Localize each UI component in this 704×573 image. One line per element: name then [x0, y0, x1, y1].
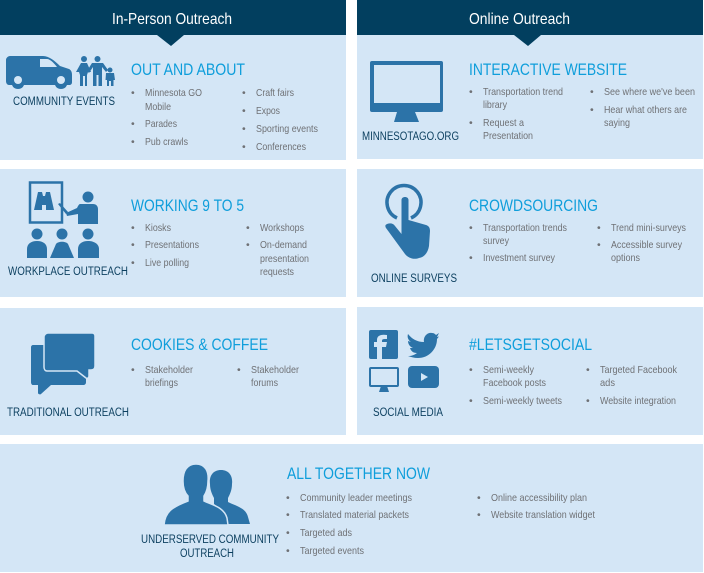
- list: interactive website, column 2: •: [590, 86, 594, 98]
- icon: desktop monitor: [370, 61, 443, 122]
- list: interactive website, column 2: •: [590, 104, 594, 116]
- list: working 9 to 5, column 2: •: [246, 239, 250, 251]
- list: out and about, column 1: [131, 87, 202, 148]
- label: community events: COMMUNITY EVENTS: [13, 96, 115, 108]
- list: all together now, column 1: •: [286, 509, 290, 521]
- icon: van: [6, 56, 72, 89]
- list: crowdsourcing, column 1: •: [469, 252, 473, 264]
- list: out and about, column 2: •: [242, 87, 246, 99]
- list: cookies and coffee, column 1: [131, 364, 193, 389]
- list: interactive website, column 1: Request a: [483, 117, 524, 129]
- icon: small monitor: [370, 368, 398, 392]
- panel: in-person header: In-Person Outreach: [112, 11, 232, 28]
- list: lets get social, column 1: [469, 364, 562, 407]
- list: out and about, column 1: •: [131, 118, 135, 130]
- list: working 9 to 5, column 2: requests: [260, 266, 294, 278]
- list: working 9 to 5, column 1: [131, 222, 199, 269]
- list: out and about, column 1: Pub crawls: [145, 136, 188, 148]
- icon: video play: [408, 366, 439, 388]
- icon: chat bubbles: [31, 333, 95, 394]
- label: workplace outreach: WORKPLACE OUTREACH: [8, 266, 128, 278]
- icon: presenter and audience: [27, 182, 99, 258]
- list: lets get social, column 2: •: [586, 395, 590, 407]
- heading: out and about: OUT AND ABOUT: [131, 61, 245, 79]
- panel: online surveys: [357, 169, 703, 297]
- label: underserved community outreach: [141, 534, 279, 560]
- panel: in-person header: [0, 0, 346, 46]
- heading: cookies and coffee: COOKIES & COFFEE: [131, 336, 268, 354]
- panel: workplace outreach: [0, 169, 346, 297]
- panel: social media: [357, 307, 703, 435]
- list: cookies and coffee, column 2: forums: [251, 377, 278, 389]
- list: all together now, column 1: Targeted ads: [300, 527, 352, 539]
- list: all together now, column 1: Translated material packets: [300, 509, 409, 521]
- list: interactive website, column 1: [469, 86, 563, 142]
- icon: facebook: [369, 330, 398, 359]
- list: out and about, column 2: •: [242, 105, 246, 117]
- list: crowdsourcing, column 1: Transportation trends: [483, 222, 567, 234]
- list: lets get social, column 2: •: [586, 364, 590, 376]
- list: cookies and coffee, column 1: •: [131, 364, 135, 376]
- icon: family: [76, 56, 115, 86]
- label: minnesotago.org: MINNESOTAGO.ORG: [362, 131, 459, 143]
- list: cookies and coffee, column 2: Stakeholder: [251, 364, 299, 376]
- list: interactive website, column 2: saying: [604, 117, 630, 129]
- list: all together now, column 2: Online accessibility plan: [491, 492, 587, 504]
- list: all together now, column 2: [477, 492, 595, 521]
- list: cookies and coffee, column 1: briefings: [145, 377, 178, 389]
- list: crowdsourcing, column 2: •: [597, 239, 601, 251]
- list: lets get social, column 1: •: [469, 364, 473, 376]
- panel: online header: [357, 0, 703, 46]
- list: lets get social, column 2: ads: [600, 377, 615, 389]
- list: out and about, column 2: •: [242, 141, 246, 153]
- list: working 9 to 5, column 1: •: [131, 257, 135, 269]
- heading: interactive website: INTERACTIVE WEBSITE: [469, 61, 627, 79]
- list: working 9 to 5, column 1: Presentations: [145, 239, 199, 251]
- list: lets get social, column 1: Semi-weekly: [483, 364, 535, 376]
- list: working 9 to 5, column 2: Workshops: [260, 222, 304, 234]
- list: out and about, column 1: Minnesota GO: [145, 87, 202, 99]
- heading: lets get social: #LETSGETSOCIAL: [469, 336, 592, 354]
- list: crowdsourcing, column 1: •: [469, 222, 473, 234]
- heading: all together now: ALL TOGETHER NOW: [287, 465, 430, 483]
- icon: two people: [164, 464, 250, 525]
- list: working 9 to 5, column 2: •: [246, 222, 250, 234]
- list: all together now, column 2: Website translation widget: [491, 509, 595, 521]
- list: all together now, column 2: •: [477, 509, 481, 521]
- list: cookies and coffee, column 2: •: [237, 364, 241, 376]
- label: underserved community outreach: UNDERSERVED COMMUNITY: [141, 534, 279, 546]
- list: crowdsourcing, column 2: Accessible survey: [611, 239, 683, 251]
- list: working 9 to 5, column 2: On-demand: [260, 239, 307, 251]
- list: lets get social, column 2: Targeted Facebook: [600, 364, 678, 376]
- list: cookies and coffee, column 2: [237, 364, 299, 389]
- list: working 9 to 5, column 2: presentation: [260, 253, 309, 265]
- list: crowdsourcing, column 1: Investment survey: [483, 252, 556, 264]
- heading: crowdsourcing: CROWDSOURCING: [469, 197, 598, 215]
- list: out and about, column 2: Conferences: [256, 141, 306, 153]
- list: cookies and coffee, column 1: Stakeholder: [145, 364, 193, 376]
- list: working 9 to 5, column 1: Kiosks: [145, 222, 171, 234]
- list: all together now, column 2: •: [477, 492, 481, 504]
- list: crowdsourcing, column 2: •: [597, 222, 601, 234]
- list: crowdsourcing, column 1: survey: [483, 235, 510, 247]
- list: out and about, column 2: Expos: [256, 105, 280, 117]
- list: all together now, column 1: •: [286, 545, 290, 557]
- list: working 9 to 5, column 1: Live polling: [145, 257, 189, 269]
- list: out and about, column 1: •: [131, 136, 135, 148]
- list: lets get social, column 2: Website integration: [600, 395, 676, 407]
- list: out and about, column 2: •: [242, 123, 246, 135]
- list: crowdsourcing, column 1: [469, 222, 567, 264]
- list: all together now, column 1: Targeted events: [300, 545, 364, 557]
- list: crowdsourcing, column 2: options: [611, 252, 640, 264]
- list: interactive website, column 1: •: [469, 117, 473, 129]
- list: lets get social, column 1: •: [469, 395, 473, 407]
- panel: traditional outreach: [0, 308, 346, 435]
- label: traditional outreach: TRADITIONAL OUTREACH: [7, 407, 129, 419]
- list: all together now, column 1: Community leader meetings: [300, 492, 412, 504]
- list: working 9 to 5, column 1: •: [131, 239, 135, 251]
- label: online surveys: ONLINE SURVEYS: [371, 273, 457, 285]
- list: lets get social, column 1: Facebook posts: [483, 377, 546, 389]
- list: out and about, column 1: •: [131, 87, 135, 99]
- list: interactive website, column 2: [590, 86, 695, 129]
- list: lets get social, column 1: Semi-weekly tweets: [483, 395, 562, 407]
- label: social media: SOCIAL MEDIA: [373, 407, 443, 419]
- panel: underserved community outreach: [0, 444, 703, 572]
- panel: online header: Online Outreach: [469, 11, 570, 28]
- list: out and about, column 1: Parades: [145, 118, 177, 130]
- heading: working 9 to 5: WORKING 9 TO 5: [131, 197, 244, 215]
- list: out and about, column 2: Sporting events: [256, 123, 318, 135]
- list: out and about, column 2: Craft fairs: [256, 87, 294, 99]
- list: interactive website, column 2: Hear what others are: [604, 104, 687, 116]
- list: interactive website, column 1: library: [483, 99, 508, 111]
- list: working 9 to 5, column 1: •: [131, 222, 135, 234]
- list: interactive website, column 1: Presentation: [483, 130, 533, 142]
- list: all together now, column 1: •: [286, 527, 290, 539]
- list: lets get social, column 2: [586, 364, 678, 407]
- panel: community events: [0, 35, 346, 160]
- label: underserved community outreach: OUTREACH: [180, 548, 234, 560]
- icon: twitter bird: [408, 333, 439, 358]
- list: interactive website, column 1: Transportation trend: [483, 86, 563, 98]
- list: working 9 to 5, column 2: [246, 222, 309, 278]
- panel: minnesotago.org: [357, 35, 703, 159]
- list: all together now, column 1: [286, 492, 412, 557]
- list: out and about, column 1: Mobile: [145, 101, 171, 113]
- list: crowdsourcing, column 2: Trend mini-surveys: [611, 222, 686, 234]
- icon: pointing hand: [385, 186, 430, 259]
- list: crowdsourcing, column 2: [597, 222, 686, 264]
- list: all together now, column 1: •: [286, 492, 290, 504]
- list: out and about, column 2: [242, 87, 318, 153]
- list: interactive website, column 1: •: [469, 86, 473, 98]
